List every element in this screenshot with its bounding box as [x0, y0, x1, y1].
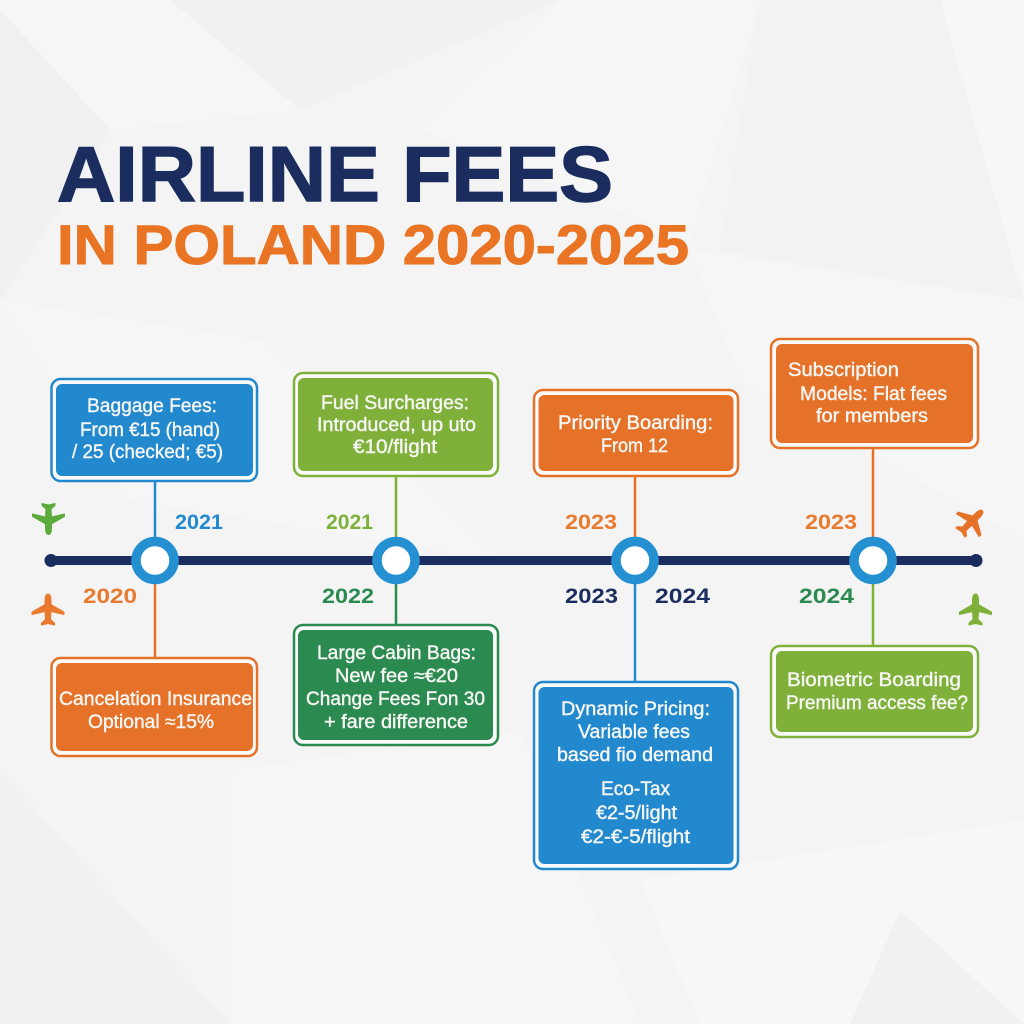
panel: dynamic pricing and eco-tax: based fio demand	[557, 745, 713, 766]
year labels	[83, 510, 857, 608]
panel: cancellation insurance: Optional ≈15%	[88, 712, 214, 733]
panel: large cabin bags	[294, 625, 498, 745]
panel: large cabin bags: New fee ≈€20	[335, 666, 458, 687]
panel: dynamic pricing and eco-tax: Variable fees	[578, 722, 690, 743]
title	[57, 130, 689, 276]
timeline axis	[44, 554, 982, 567]
year labels: 2023	[805, 510, 857, 534]
panel: baggage fees: Baggage Fees:	[87, 396, 217, 417]
panel: large cabin bags: Large Cabin Bags:	[317, 643, 476, 664]
panel: priority boarding	[534, 390, 738, 476]
panel: subscription models	[771, 339, 978, 448]
panel: priority boarding: From 12	[601, 436, 668, 457]
panel: dynamic pricing and eco-tax: €2-5/light	[596, 803, 678, 824]
connector lines	[155, 449, 873, 681]
panel: fuel surcharges: €10/flight	[353, 437, 438, 458]
year labels: 2021	[175, 510, 223, 534]
panel: baggage fees: From €15 (hand)	[80, 420, 220, 441]
panel: cancellation insurance	[52, 658, 257, 756]
panel: fuel surcharges: Introduced, up uto	[317, 415, 476, 436]
year labels: 2023	[565, 584, 618, 608]
panel: subscription models: for members	[816, 406, 928, 427]
icon: green plane top left	[32, 504, 64, 534]
timeline nodes	[136, 542, 892, 580]
panel: baggage fees: / 25 (checked; €5)	[72, 442, 223, 463]
year labels: 2024	[655, 584, 710, 608]
panel: dynamic pricing and eco-tax	[534, 682, 738, 869]
year labels: 2023	[565, 510, 617, 534]
panel: biometric boarding	[771, 646, 978, 737]
panel: biometric boarding: Biometric Boarding	[787, 670, 961, 691]
year labels: 2021	[326, 510, 373, 534]
year labels: 2022	[322, 584, 374, 608]
panel: dynamic pricing and eco-tax: €2-€-5/flight	[581, 827, 691, 848]
panel: dynamic pricing and eco-tax: Eco-Tax	[601, 779, 670, 800]
panel: fuel surcharges	[294, 373, 498, 476]
panel: fuel surcharges: Fuel Surcharges:	[321, 393, 469, 414]
panel: large cabin bags: Change Fees Fon 30	[306, 689, 485, 710]
panel: subscription models: Subscription	[788, 360, 899, 381]
icon: orange plane bottom left	[32, 594, 64, 625]
icon: green plane bottom right	[960, 594, 992, 625]
title line 1: AIRLINE FEES	[57, 130, 613, 218]
panel: baggage fees	[52, 379, 257, 481]
title line 2: IN POLAND 2020-2025	[57, 213, 689, 276]
panel: priority boarding: Priority Boarding:	[558, 413, 713, 434]
year labels: 2020	[83, 584, 137, 608]
panel: large cabin bags: + fare difference	[324, 712, 468, 733]
year labels: 2024	[799, 584, 854, 608]
icon: orange plane top right	[949, 499, 994, 544]
panel: dynamic pricing and eco-tax: Dynamic Pricing:	[561, 699, 710, 720]
panel: subscription models: Models: Flat fees	[800, 384, 947, 405]
panel: biometric boarding: Premium access fee?	[786, 693, 968, 714]
panel: cancellation insurance: Cancelation Insurance	[59, 689, 252, 710]
